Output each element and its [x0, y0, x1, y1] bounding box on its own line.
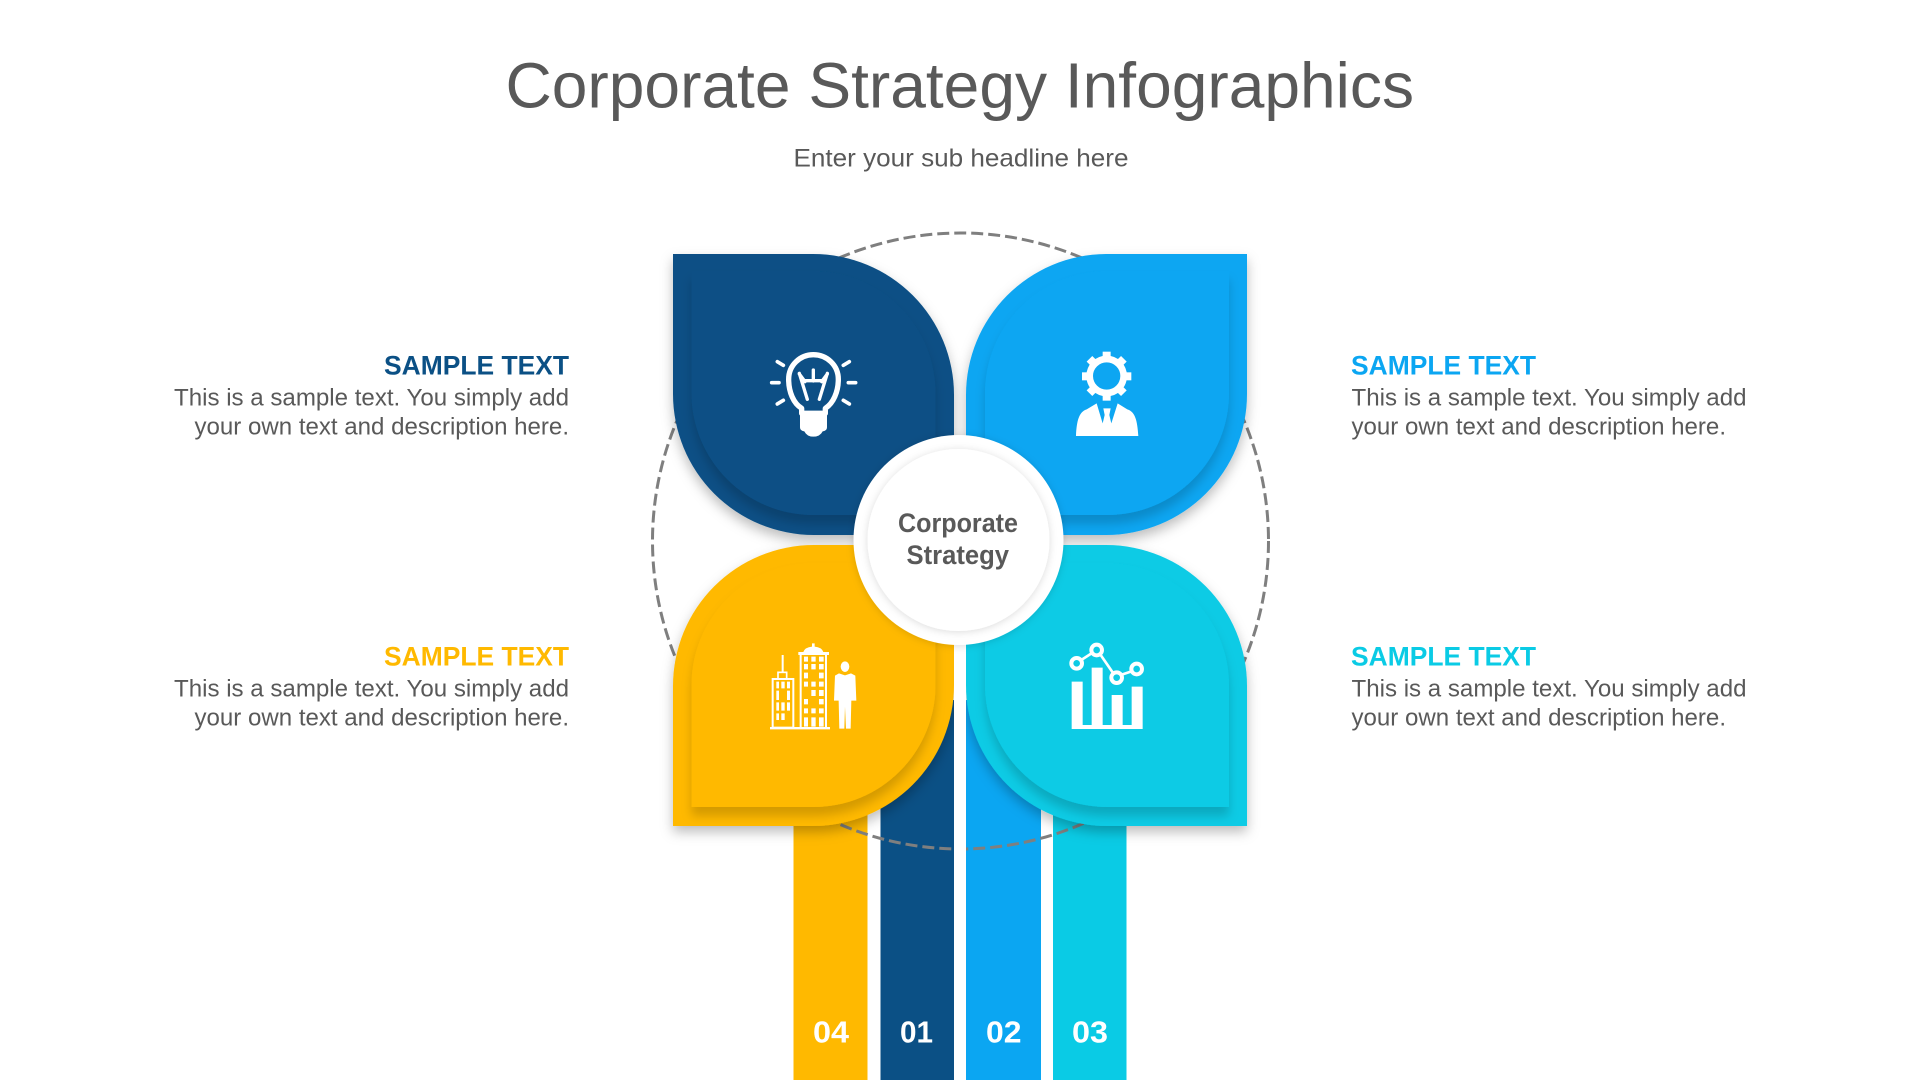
title: Corporate Strategy Infographics [506, 50, 1414, 122]
text block: bottom right: This is a sample text. You simply add [1352, 676, 1746, 703]
text block: top left: your own text and description here. [194, 413, 569, 440]
icon: light bulb [772, 355, 856, 437]
text block: bottom left: This is a sample text. You simply add [174, 676, 569, 703]
subtitle: Enter your sub headline here [794, 145, 1128, 173]
petal 01 dark blue [673, 254, 954, 535]
petal 03 cyan [966, 545, 1247, 826]
strip 01 [880, 700, 954, 1080]
text block: bottom left [174, 641, 569, 732]
dashed ring [652, 233, 1268, 849]
text block: bottom left: your own text and description here. [194, 705, 569, 732]
icon: bar and line chart [1071, 645, 1143, 729]
strip numbers [813, 1015, 1108, 1050]
text block: top right [1351, 351, 1746, 440]
center circle [854, 435, 1064, 645]
center label: Strategy [906, 540, 1009, 570]
number 01: 01 [900, 1015, 933, 1050]
number 03: 03 [1072, 1015, 1108, 1050]
text block: top right: your own text and description here. [1352, 413, 1726, 440]
text block: top left: SAMPLE TEXT [384, 351, 569, 381]
text block: top right: This is a sample text. You simply add [1352, 384, 1746, 411]
text block: bottom right [1351, 641, 1746, 732]
icon: buildings and businessman [770, 643, 856, 729]
petal 04 yellow [673, 545, 954, 826]
center label [898, 508, 1018, 570]
text block: top left [174, 351, 569, 440]
number 02: 02 [986, 1015, 1022, 1050]
text block: bottom right: SAMPLE TEXT [1351, 641, 1536, 671]
number strips [794, 700, 1126, 1080]
strip 03 [1053, 700, 1126, 1080]
center label: Corporate [898, 508, 1018, 538]
text block: top left: This is a sample text. You simply add [174, 384, 569, 411]
text block: top right: SAMPLE TEXT [1351, 351, 1536, 381]
strip 04 [794, 700, 868, 1080]
petal 02 bright blue [966, 254, 1247, 535]
strip 02 [966, 700, 1041, 1080]
number 04: 04 [813, 1015, 850, 1050]
text block: bottom left: SAMPLE TEXT [384, 641, 569, 671]
icon: person with gear [1076, 352, 1138, 436]
text block: bottom right: your own text and description here. [1352, 705, 1726, 732]
